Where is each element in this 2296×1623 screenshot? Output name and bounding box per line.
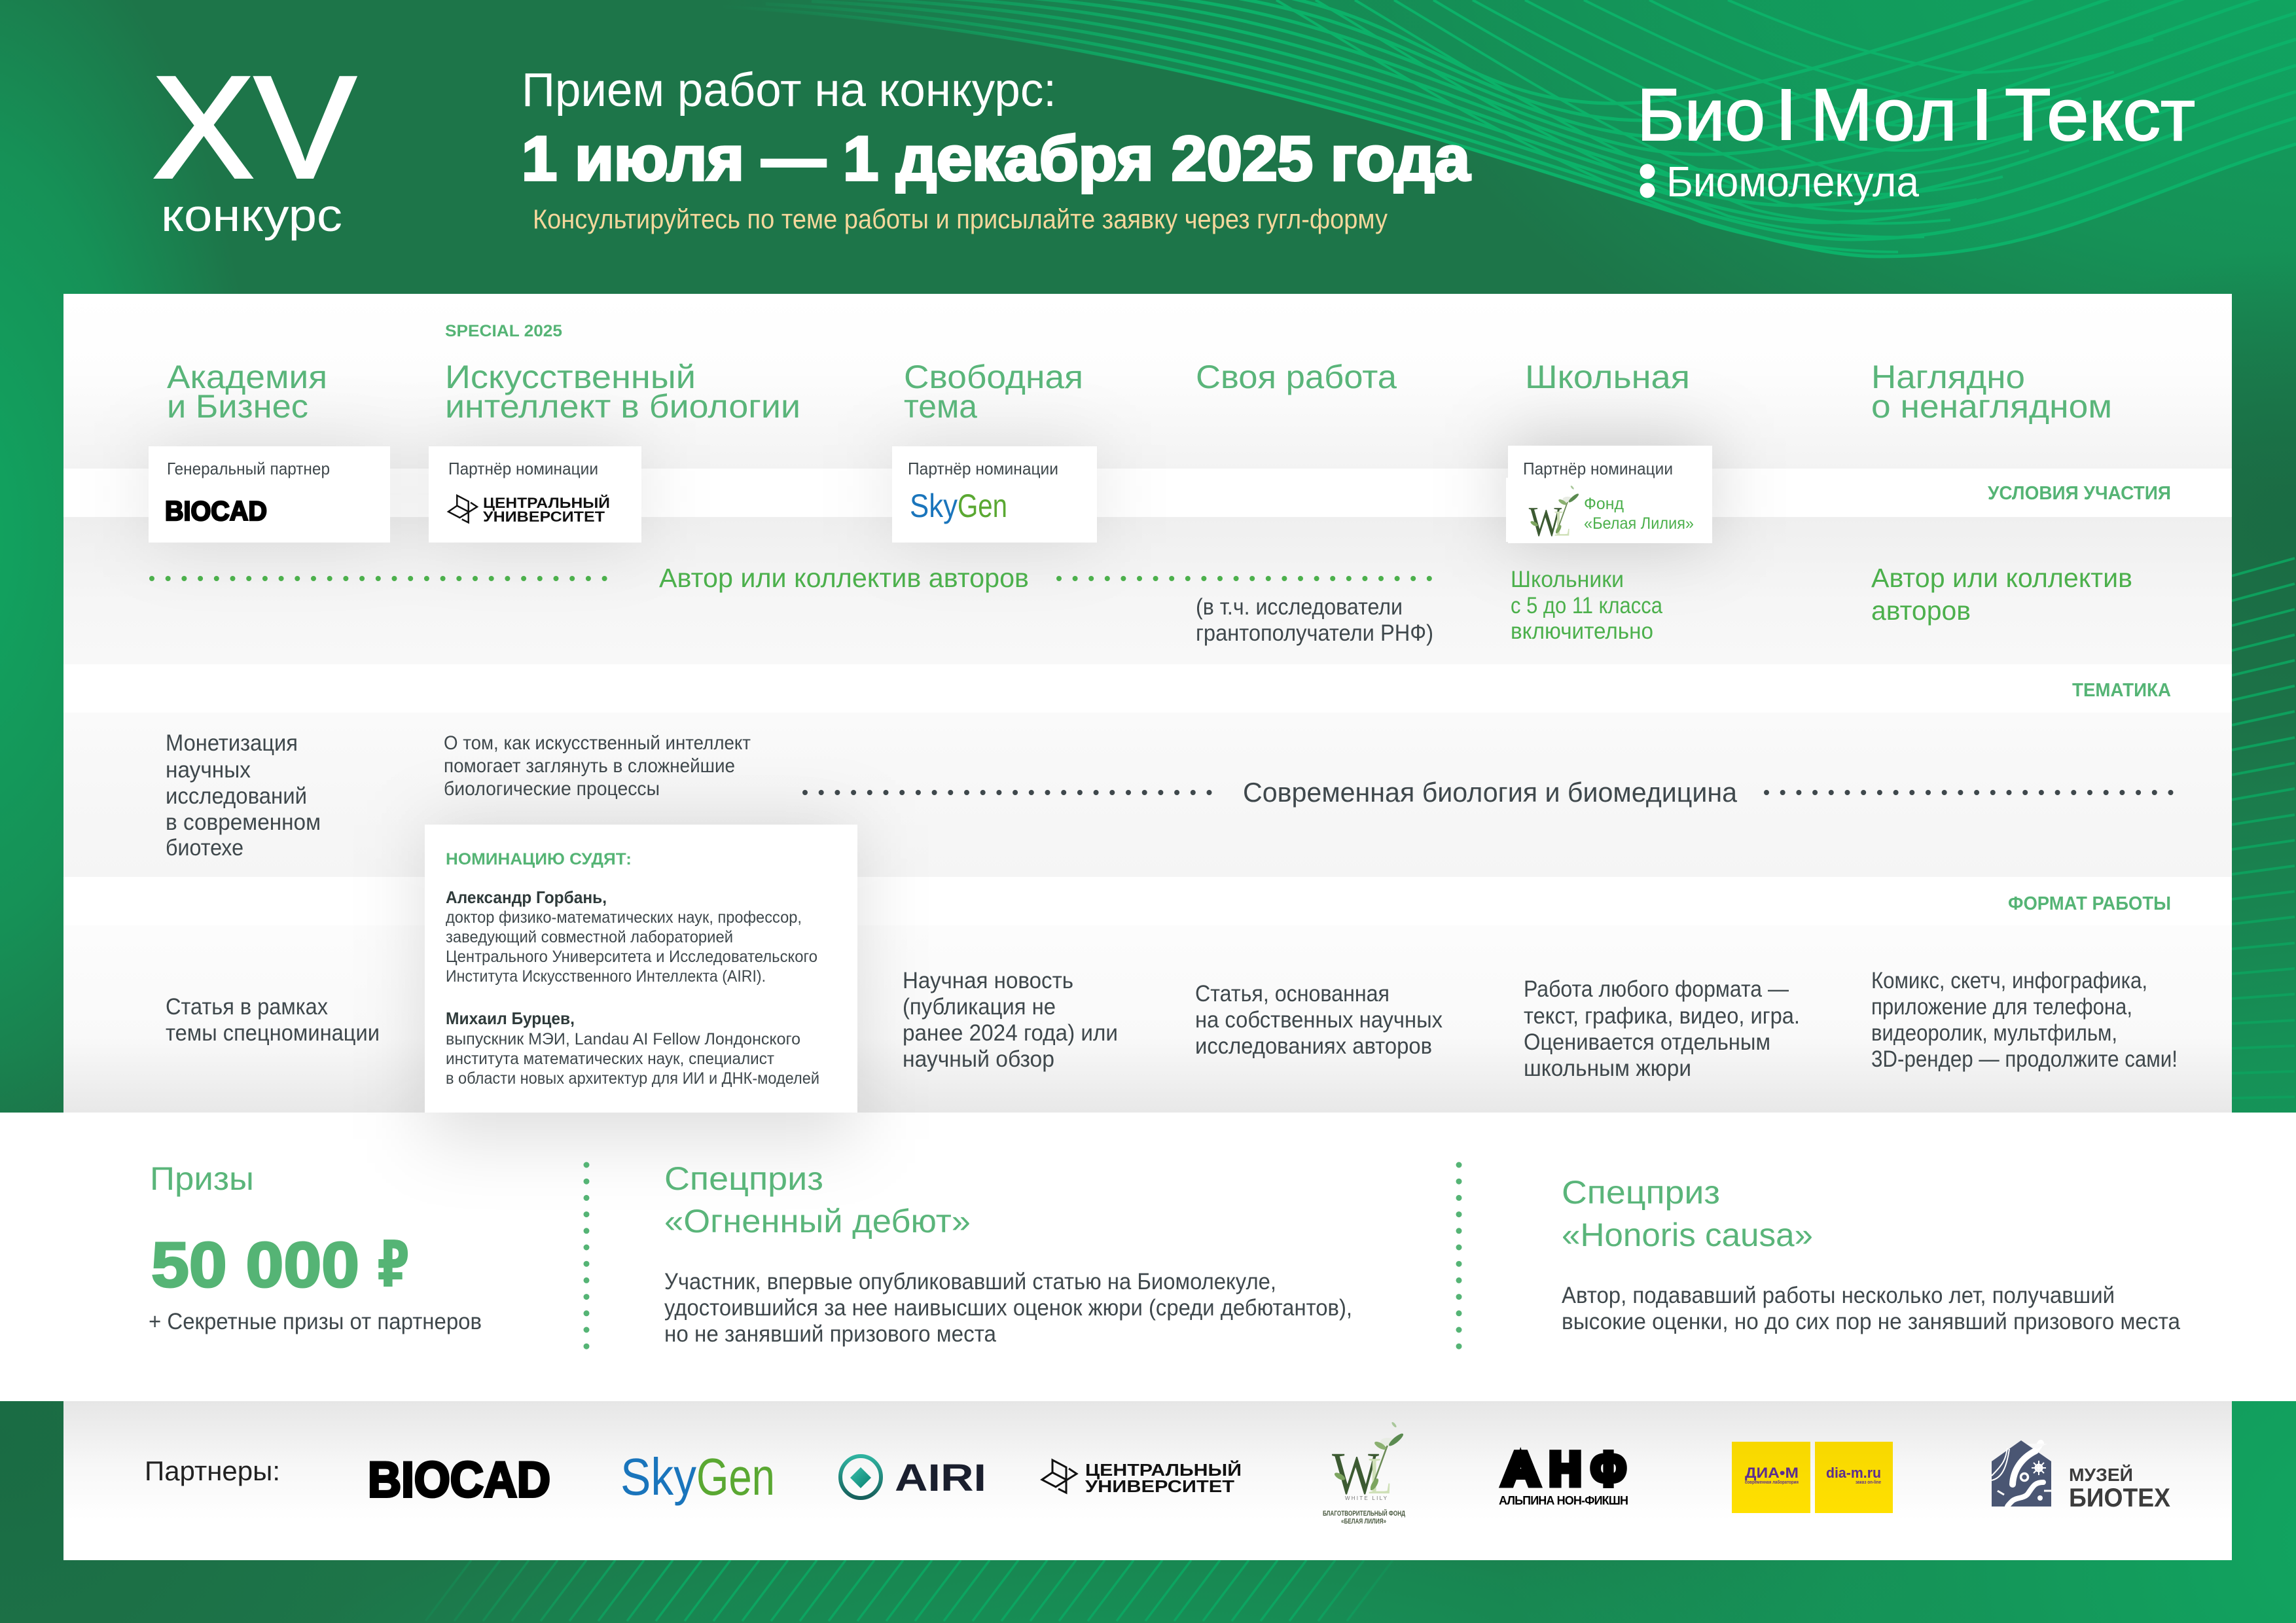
panel: partners strip: [63, 1401, 2232, 1560]
card: jury: выпускник МЭИ, Landau AI Fellow Лондонского: [446, 1030, 800, 1048]
text: monetization: биотехе: [166, 835, 243, 861]
logo: Dia-M: [1732, 1442, 1893, 1513]
row: topics: [166, 730, 2172, 861]
card: jury: в области новых архитектур для ИИ и ДНК-моделей: [446, 1069, 819, 1088]
card: partner White Lily: Партнёр номинации: [1523, 459, 1673, 478]
prize: Honoris causa: Автор, подававший работы несколько лет, получавший: [1562, 1283, 2115, 1308]
text: own research: исследованиях авторов: [1195, 1033, 1432, 1059]
logo: SkyGen: Gen: [696, 1448, 775, 1506]
logo: Alpina Non-Fiction: [1499, 1444, 1628, 1507]
prize: Fiery debut: «Огненный дебют»: [664, 1203, 971, 1240]
header: [152, 46, 2195, 241]
text: RSF grantees: (в т.ч. исследователи: [1196, 594, 1403, 620]
icon: White Lily small: W: [1529, 498, 1562, 544]
text: science news: ранее 2024 года) или: [903, 1020, 1118, 1046]
text: school pupils: [1511, 567, 1662, 644]
text: monetization: в современном: [166, 810, 321, 835]
card: jury: Михаил Бурцев,: [446, 1008, 575, 1028]
text: article: темы спецноминации: [166, 1020, 380, 1046]
logo: White Lily: W: [1332, 1440, 1379, 1507]
logo: AIRI: AIRI: [895, 1457, 986, 1499]
card: partner White Lily: «Белая Лилия»: [1584, 514, 1694, 533]
dotted line: [805, 790, 1213, 795]
text: any format: текст, графика, видео, игра.: [1524, 1003, 1800, 1029]
text: RSF grantees: [1196, 594, 1433, 646]
panel: main table background: [63, 294, 2232, 1113]
text: school pupils: Школьники: [1511, 567, 1624, 592]
heading: Академия и Бизнес: и Бизнес: [167, 388, 308, 425]
section label: topics: ТЕМАТИКА: [2072, 680, 2171, 701]
prize: main: 50 000: [151, 1229, 359, 1300]
row: conditions of participation: [152, 563, 2132, 646]
card: partner SkyGen: Партнёр номинации: [908, 459, 1058, 478]
logo: Alpina Non-Fiction: А: [1502, 1444, 1539, 1495]
text: AI topic: биологические процессы: [444, 778, 660, 800]
logo: SkyGen: [620, 1448, 775, 1506]
text: comics and more: приложение для телефона,: [1871, 994, 2132, 1020]
text: author or team, visual: авторов: [1871, 596, 1971, 626]
label: partners: Партнеры:: [145, 1455, 280, 1486]
logo: Био Мол Текст: Био: [1637, 74, 1765, 156]
text: science news: научный обзор: [903, 1046, 1054, 1072]
card shadows: [149, 438, 1712, 1139]
heading: Свободная тема: Свободная: [904, 359, 1083, 395]
heading: dates: Консультируйтесь по теме работы и присылайте заявку через гугл-форму: [533, 204, 1388, 234]
heading: Свободная тема: [904, 359, 1083, 425]
heading: Школьная: Школьная: [1525, 359, 1690, 395]
prizes: [149, 1160, 2181, 1348]
text: article: Статья в рамках: [166, 994, 328, 1020]
dotted line left: [152, 576, 610, 581]
logo: Био Мол Текст: [1637, 74, 2195, 156]
card: partner SkyGen: Sky: [910, 488, 958, 524]
heading: Искусственный интеллект в биологии: Искусственный: [445, 359, 696, 395]
heading: Наглядно о ненаглядном: [1871, 359, 2112, 425]
logo: White Lily: «БЕЛАЯ ЛИЛИЯ»: [1341, 1518, 1386, 1525]
text: author or team, visual: Автор или коллектив: [1871, 563, 2132, 593]
card: jury: института математических наук, специалист: [446, 1050, 775, 1068]
text: article: [166, 994, 380, 1046]
logo: Central University: УНИВЕРСИТЕТ: [1085, 1476, 1234, 1496]
text: monetization: [166, 730, 321, 861]
prize: Fiery debut: Спецприз: [664, 1160, 823, 1197]
text: school pupils: включительно: [1511, 618, 1653, 644]
heading: Своя работа: Своя работа: [1196, 359, 1397, 395]
prize: main: ₽: [377, 1228, 410, 1300]
heading: Академия и Бизнес: [167, 359, 327, 425]
card: general partner BIOCAD: Генеральный партнер: [167, 459, 330, 478]
logo: Alpina Non-Fiction: Ф: [1591, 1444, 1626, 1495]
text: monetization: научных: [166, 757, 251, 783]
logo: Биомолекула: Биомолекула: [1666, 158, 1920, 205]
card: partner Central University: Партнёр номинации: [448, 459, 598, 478]
card: partner White Lily: Фонд: [1584, 495, 1624, 513]
card: jury: Александр Горбань,: [446, 887, 607, 907]
logo: BIOCAD: BIOCAD: [368, 1452, 550, 1508]
section label: format: ФОРМАТ РАБОТЫ: [2008, 893, 2171, 914]
card: partner Central University: УНИВЕРСИТЕТ: [483, 508, 605, 525]
card: general partner BIOCAD: [149, 446, 390, 543]
logo: SkyGen: Sky: [620, 1448, 696, 1506]
panel: prizes strip: [0, 1113, 2296, 1401]
text: own research: Статья, основанная: [1195, 981, 1390, 1007]
card: jury: доктор физико-математических наук, профессор,: [446, 908, 802, 927]
nominations headings: [167, 322, 2112, 425]
section label: conditions: УСЛОВИЯ УЧАСТИЯ: [1988, 483, 2171, 504]
text: modern biology: Современная биология и биомедицина: [1243, 777, 1738, 808]
text: author or team: Автор или коллектив авторов: [659, 563, 1029, 593]
text: RSF grantees: грантополучатели РНФ): [1196, 620, 1433, 646]
prize: main: + Секретные призы от партнеров: [149, 1309, 482, 1334]
icon: Central University: [448, 495, 477, 522]
dotted divider: [1456, 1165, 1462, 1348]
text: monetization: исследований: [166, 783, 307, 809]
prize: Honoris causa: [1562, 1174, 2181, 1334]
dotted line right: [1059, 576, 1431, 581]
logo: AIRI: [840, 1456, 986, 1499]
text: own research: на собственных научных: [1195, 1007, 1443, 1033]
prize: main: Призы: [150, 1160, 254, 1197]
logo: Museum Biotech: МУЗЕЙ: [2069, 1464, 2133, 1485]
logo: Dia-M: ДИА•М: [1745, 1465, 1799, 1481]
card: general partner BIOCAD: BIOCAD: [165, 495, 267, 526]
card: partner Central University: ЦЕНТРАЛЬНЫЙ: [483, 495, 610, 511]
text: comics and more: 3D-рендер — продолжите сами!: [1871, 1046, 2178, 1072]
logo: Museum Biotech: [1992, 1440, 2170, 1512]
prize: Fiery debut: удостоившийся за нее наивысших оценок жюри (среди дебютантов),: [664, 1295, 1352, 1321]
row: work format: [166, 968, 2178, 1081]
text: AI topic: помогает заглянуть в сложнейшие: [444, 755, 735, 777]
prize: Honoris causa: высокие оценки, но до сих пор не занявший призового места: [1562, 1309, 2181, 1334]
prize: main: [149, 1160, 482, 1334]
logo: Museum Biotech: БИОТЕХ: [2069, 1484, 2170, 1512]
heading: dates: 1 июля — 1 декабря 2025 года: [522, 124, 1471, 194]
logo: Dia-M: современная лаборатория: [1745, 1480, 1799, 1485]
text: any format: школьным жюри: [1524, 1056, 1691, 1081]
card: partner White Lily: [1506, 446, 1712, 544]
title: XV конкурс: XV: [152, 46, 356, 209]
card: partner SkyGen: Gen: [958, 488, 1007, 524]
heading: Наглядно о ненаглядном: о ненаглядном: [1871, 388, 2112, 425]
heading: Искусственный интеллект в биологии: [445, 359, 800, 425]
logo: White Lily: БЛАГОТВОРИТЕЛЬНЫЙ ФОНД: [1323, 1509, 1405, 1518]
text: comics and more: [1871, 968, 2178, 1072]
label: SPECIAL 2025: SPECIAL 2025: [445, 322, 562, 340]
prize: Honoris causa: Спецприз: [1562, 1174, 1720, 1211]
text: science news: [903, 968, 1118, 1072]
text: AI topic: [444, 732, 751, 800]
dotted line: [1767, 790, 2172, 795]
text: author or team, visual: [1871, 563, 2132, 626]
logo: White Lily: [1323, 1421, 1405, 1525]
heading: Искусственный интеллект в биологии: интеллект в биологии: [445, 388, 800, 425]
heading: dates: Прием работ на конкурс:: [522, 64, 1056, 116]
card: jury: Центрального Университета и Исследовательского: [446, 948, 817, 966]
logo: Био Мол Текст: Текст: [2005, 74, 2195, 156]
dotted divider: [584, 1165, 589, 1348]
text: any format: Оценивается отдельным: [1524, 1029, 1770, 1055]
logo: White Lily: L: [1368, 1448, 1392, 1505]
card: jury: заведующий совместной лабораторией: [446, 928, 733, 946]
logo: Alpina Non-Fiction: Н: [1549, 1444, 1581, 1495]
text: any format: [1524, 976, 1800, 1081]
heading: Наглядно о ненаглядном: Наглядно: [1871, 359, 2025, 395]
prize: Fiery debut: Участник, впервые опубликовавший статью на Биомолекуле,: [664, 1269, 1276, 1294]
text: comics and more: Комикс, скетч, инфографика,: [1871, 968, 2147, 993]
logo: White Lily: WHITE LILY: [1345, 1495, 1388, 1501]
card: partner Central University: [429, 446, 641, 543]
text: monetization: Монетизация: [166, 730, 298, 756]
card: partner SkyGen: [892, 446, 1097, 543]
card: jury: [425, 825, 857, 1113]
card: jury: Института Искусственного Интеллекта (AIRI).: [446, 967, 766, 986]
text: science news: (публикация не: [903, 994, 1056, 1020]
logo: Dia-M: заказ on-line: [1856, 1480, 1881, 1485]
text: school pupils: с 5 до 11 класса: [1511, 593, 1662, 618]
logo: Dia-M: dia-m.ru: [1826, 1465, 1881, 1481]
text: own research: [1195, 981, 1443, 1059]
icon: White Lily small: [1529, 485, 1580, 544]
card: jury: НОМИНАЦИЮ СУДЯТ:: [446, 850, 632, 868]
text: any format: Работа любого формата —: [1524, 976, 1789, 1002]
icon: White Lily small: L: [1554, 503, 1571, 544]
heading: Академия и Бизнес: Академия: [167, 359, 327, 395]
logo: Central University: [1042, 1460, 1242, 1496]
heading: Свободная тема: тема: [904, 388, 977, 425]
prize: Fiery debut: [664, 1160, 1352, 1347]
logo: Био Мол Текст: Мол: [1810, 74, 1957, 156]
prize: Honoris causa: «Honoris causa»: [1562, 1217, 1813, 1253]
logo: Central University: ЦЕНТРАЛЬНЫЙ: [1085, 1460, 1242, 1480]
text: science news: Научная новость: [903, 968, 1073, 993]
partners row: [145, 1421, 2170, 1525]
text: comics and more: видеоролик, мультфильм,: [1871, 1020, 2117, 1046]
title: XV конкурс: конкурс: [161, 190, 342, 241]
logo: Alpina Non-Fiction: АЛЬПИНА НОН-ФИКШН: [1499, 1494, 1628, 1507]
prize: Fiery debut: но не занявший призового места: [664, 1321, 997, 1347]
heading: dates: [522, 64, 1471, 234]
text: AI topic: О том, как искусственный интеллект: [444, 732, 751, 754]
